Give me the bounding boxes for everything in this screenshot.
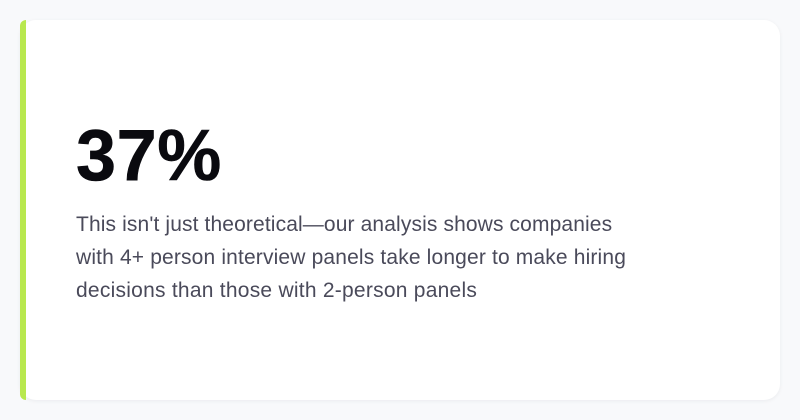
text block: description [76,213,626,302]
text block: description: with 4+ person interview panels take longer to make hiring [76,246,626,269]
text block: description: This isn't just theoretical—our analysis shows companies [76,213,612,236]
accent bar [20,20,26,400]
text block: description: decisions than those with 2-person panels [76,279,477,302]
heading: 37% statistic: 37% [76,116,222,196]
